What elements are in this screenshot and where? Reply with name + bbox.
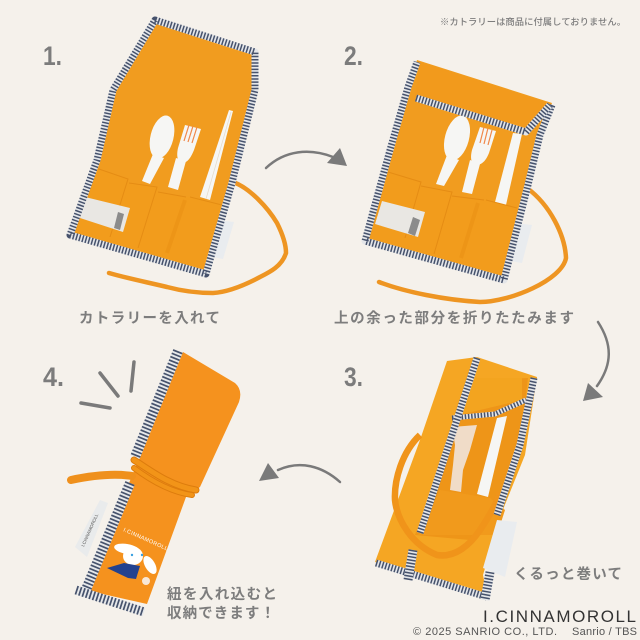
pockets [365,172,517,280]
pocket [418,490,505,535]
fabric [362,60,552,282]
strap [379,188,566,302]
fold flap [415,62,550,131]
brand print: I.CINNAMOROLL [122,527,168,552]
step 1: open cutlery roll [68,18,286,293]
character [107,542,159,585]
chopsticks [200,110,233,200]
copyright [413,626,637,638]
arrow 1 to 2 [266,148,347,168]
right striped edge [497,378,534,515]
burst lines [81,362,134,408]
chopsticks [477,416,507,497]
copyright: Sanrio / TBS [572,626,637,638]
strap [109,182,286,293]
fabric [68,18,258,276]
caption 4 [167,586,277,622]
arrow 2 to 3 [583,322,609,401]
white tag [208,220,234,259]
spoon [436,113,475,186]
care label [375,201,425,237]
QR mark [408,217,420,236]
fork [168,125,201,190]
brand logo: I.CINNAMOROLL [483,607,636,626]
copyright: © 2025 SANRIO CO., LTD. [413,626,557,638]
left striped edge [420,358,477,533]
step number 4: 4. [43,362,64,392]
caption 3: くるっと巻いて [514,566,622,583]
bottom stripe [76,590,144,612]
step number 3: 3. [344,362,363,392]
step number 1: 1. [43,41,62,71]
stripe edge [85,351,178,592]
inner band [452,400,526,418]
fold stripe [416,98,550,132]
fork tines [184,125,197,143]
bottom striped edge [376,550,490,600]
strap loop [395,435,500,555]
fork [450,425,477,492]
tie [71,460,196,495]
striped edges [365,62,552,280]
QR mark [114,212,124,230]
white tag [483,520,517,577]
note: cutlery not included: ※カトラリーは商品に付属しておりません。 [440,16,626,27]
white side tag [75,500,108,557]
back fabric [375,357,537,600]
caption 1: カトラリーを入れて [79,310,220,327]
step 3: rolled up [375,357,537,600]
chopsticks [495,133,522,205]
roll body [85,352,240,604]
white side tag: I.CINNAMOROLL [80,512,100,547]
inner fabric [415,378,528,540]
fork [462,127,496,194]
step 4: rolled and tied [71,351,240,612]
upper inner shade [455,378,522,416]
caption 4: 収納できます！ [167,605,275,622]
fork tines [480,127,492,145]
caption 4: 紐を入れ込むと [167,586,277,603]
care label [80,197,130,232]
step 2: flap folded [362,60,566,302]
white tag [505,223,532,263]
spoon [142,113,178,184]
caption 2: 上の余った部分を折りたたみます [334,309,574,327]
pockets [70,168,222,274]
arrow 3 to 4 [259,463,340,482]
step number 2: 2. [344,41,363,71]
striped edge [70,20,255,274]
